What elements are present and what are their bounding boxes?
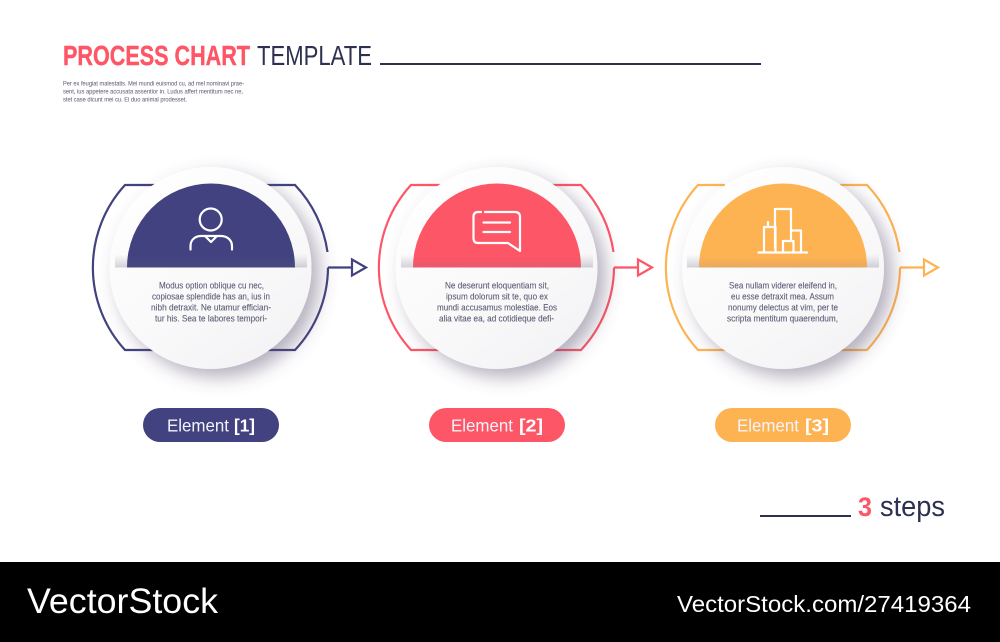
label pill 3: [3] (805, 416, 829, 436)
label pill 1: Element (167, 416, 229, 436)
watermark footer: VectorStock (27, 582, 219, 621)
panel: element 1 (93, 167, 366, 369)
title (63, 40, 761, 71)
white disc 2 (396, 167, 598, 369)
title: TEMPLATE (257, 40, 372, 71)
white disc 1 (110, 167, 312, 369)
pocket shadow 1 (115, 254, 307, 268)
icon: speech bubble (474, 212, 520, 251)
body text 3 (727, 280, 838, 324)
pocket shadow 3 (687, 254, 879, 268)
body text 1: copiosae splendide has an, ius in (152, 292, 270, 302)
body text 1: tur his. Sea te labores tempori- (155, 314, 267, 324)
body text 1: nibh detraxit. Ne utamur effician- (151, 302, 271, 312)
body text 3: nonumy delectus at vim, per te (728, 302, 838, 312)
panel: element 3 (666, 167, 938, 369)
coloured half circle 3 (699, 184, 867, 268)
white disc 3 (682, 167, 884, 369)
label pill 3 (715, 408, 851, 442)
watermark footer (0, 562, 1000, 642)
coloured half circle 2 (413, 184, 581, 268)
body text 1: Modus option oblique cu nec, (159, 280, 264, 290)
panel: element 2 (379, 167, 652, 369)
icon: person (190, 208, 232, 250)
intro text: stet case dicunt mei cu. Ei duo animal prodesset. (63, 96, 187, 104)
outer ring and arrow 1 (93, 185, 366, 350)
pocket shadow 2 (401, 254, 593, 268)
intro text (63, 80, 244, 104)
label pill 2: Element (451, 416, 513, 436)
body text 1 (151, 280, 271, 324)
body text 2: mundi accusamus molestiae. Eos (437, 302, 557, 312)
body text 3: Sea nullam viderer eleifend in, (729, 280, 837, 290)
outer ring and arrow 3 (666, 185, 938, 350)
outer ring and arrow 2 (379, 185, 652, 350)
coloured half circle 1 (127, 184, 295, 268)
label pill 2: [2] (519, 416, 543, 436)
steps counter: 3 (858, 492, 872, 522)
body text 2 (437, 280, 557, 324)
watermark footer: VectorStock.com/27419364 (677, 591, 971, 617)
body text 2: ipsum dolorum sit te, quo ex (446, 292, 548, 302)
icon: city buildings (758, 209, 807, 252)
label pill 2 (429, 408, 565, 442)
label pill 3: Element (737, 416, 799, 436)
body text 3: eu esse detraxit mea. Assum (731, 292, 834, 302)
label pill 1 (143, 408, 279, 442)
title: PROCESS CHART (63, 40, 250, 71)
intro text: sent, ius appetere accusata assentior in. Ludus affert mentitum nec ne, (63, 88, 243, 96)
steps counter: steps (880, 491, 945, 523)
label pill 1: [1] (234, 416, 255, 436)
intro text: Per ex feugiat malestatis. Mei mundi euismod cu, ad mel nominavi prae- (63, 80, 244, 88)
body text 2: Ne deserunt eloquentiam sit, (445, 280, 549, 290)
body text 2: alia vitae ea, ad cotidieque defi- (439, 314, 554, 324)
body text 3: scripta mentitum quaerendum, (727, 314, 838, 324)
steps counter (760, 491, 945, 523)
